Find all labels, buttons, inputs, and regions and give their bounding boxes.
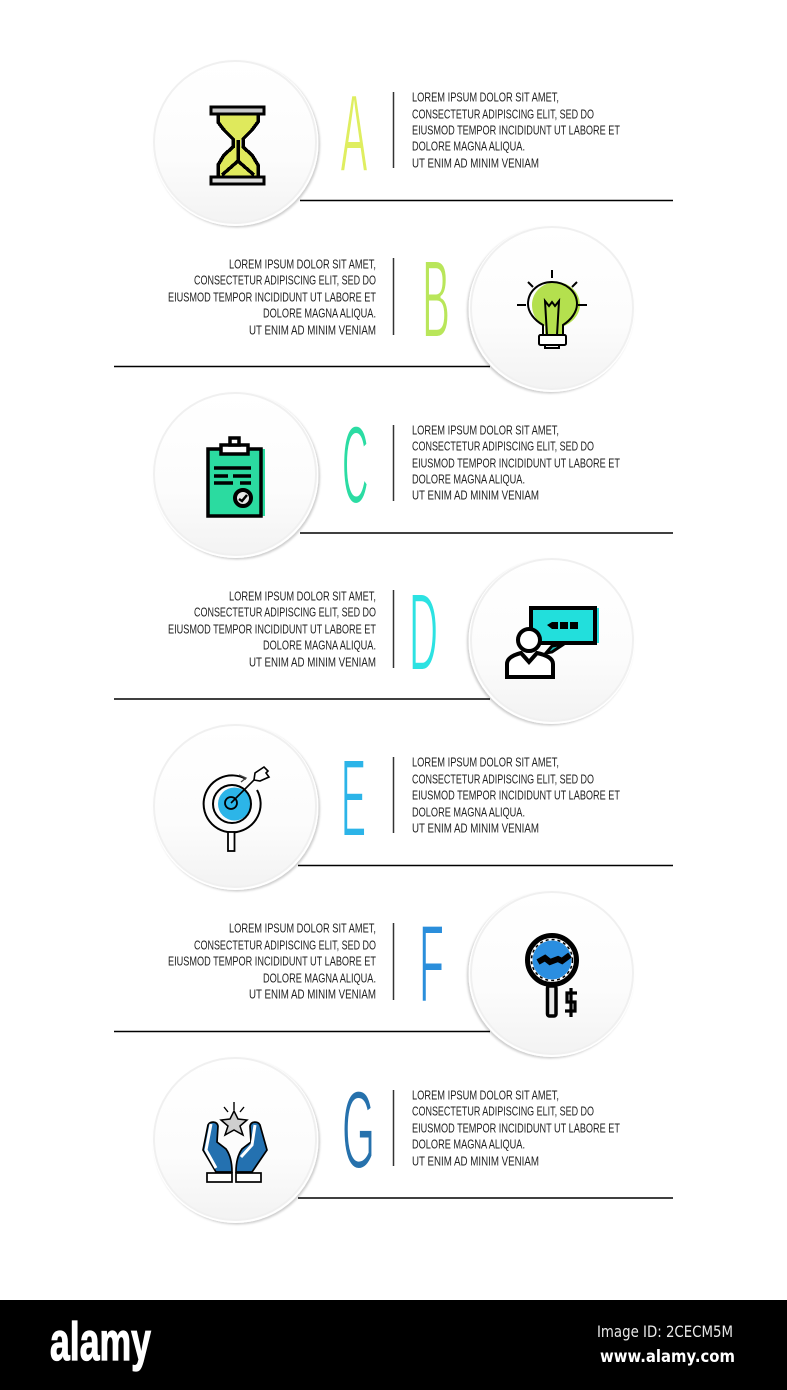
text block B: DOLORE MAGNA ALIQUA. bbox=[263, 306, 376, 320]
text block G: EIUSMOD TEMPOR INCIDIDUNT UT LABORE ET bbox=[412, 1121, 620, 1135]
text block B: EIUSMOD TEMPOR INCIDIDUNT UT LABORE ET bbox=[168, 290, 376, 304]
row G: G bbox=[342, 1069, 375, 1192]
row F bbox=[114, 891, 634, 1057]
icon: person with speech bubble bbox=[507, 608, 599, 677]
text block D: EIUSMOD TEMPOR INCIDIDUNT UT LABORE ET bbox=[168, 622, 376, 636]
row C: C bbox=[342, 404, 368, 527]
text block C: DOLORE MAGNA ALIQUA. bbox=[412, 472, 525, 486]
icon: clipboard bbox=[208, 438, 265, 516]
text block B: LOREM IPSUM DOLOR SIT AMET, bbox=[229, 257, 376, 271]
text block F: EIUSMOD TEMPOR INCIDIDUNT UT LABORE ET bbox=[168, 954, 376, 968]
text block G: CONSECTETUR ADIPISCING ELIT, SED DO bbox=[412, 1104, 594, 1118]
alamy logo: alamy bbox=[50, 1312, 151, 1372]
text block A: UT ENIM AD MINIM VENIAM bbox=[412, 156, 539, 170]
text block F: CONSECTETUR ADIPISCING ELIT, SED DO bbox=[194, 938, 376, 952]
text block E bbox=[412, 755, 620, 835]
text block G: UT ENIM AD MINIM VENIAM bbox=[412, 1154, 539, 1168]
icon: hourglass bbox=[211, 107, 264, 184]
text block A bbox=[412, 90, 620, 170]
text block B bbox=[168, 257, 376, 337]
text block B: CONSECTETUR ADIPISCING ELIT, SED DO bbox=[194, 273, 376, 287]
text block G: LOREM IPSUM DOLOR SIT AMET, bbox=[412, 1088, 559, 1102]
text block D: DOLORE MAGNA ALIQUA. bbox=[263, 638, 376, 652]
row C bbox=[152, 392, 673, 558]
text block C: EIUSMOD TEMPOR INCIDIDUNT UT LABORE ET bbox=[412, 456, 620, 470]
text block A: DOLORE MAGNA ALIQUA. bbox=[412, 139, 525, 153]
text block F bbox=[168, 921, 376, 1001]
icon: hands holding star bbox=[203, 1102, 267, 1182]
website: www.alamy.com bbox=[600, 1347, 735, 1367]
text block E: CONSECTETUR ADIPISCING ELIT, SED DO bbox=[412, 772, 594, 786]
text block D: CONSECTETUR ADIPISCING ELIT, SED DO bbox=[194, 605, 376, 619]
text block D: UT ENIM AD MINIM VENIAM bbox=[249, 655, 376, 669]
text block D bbox=[168, 589, 376, 669]
row E: E bbox=[341, 737, 366, 860]
text block C: LOREM IPSUM DOLOR SIT AMET, bbox=[412, 423, 559, 437]
row A bbox=[152, 60, 673, 226]
icon: magnifier with dollar bbox=[528, 936, 577, 1017]
text block G bbox=[412, 1088, 620, 1168]
image id: Image ID: 2CECM5M bbox=[597, 1322, 733, 1341]
row D: D bbox=[409, 571, 438, 694]
row A: A bbox=[340, 72, 368, 195]
watermark footer bar bbox=[0, 1300, 787, 1390]
row F: F bbox=[419, 903, 444, 1026]
text block A: EIUSMOD TEMPOR INCIDIDUNT UT LABORE ET bbox=[412, 123, 620, 137]
text block E: EIUSMOD TEMPOR INCIDIDUNT UT LABORE ET bbox=[412, 788, 620, 802]
text block D: LOREM IPSUM DOLOR SIT AMET, bbox=[229, 589, 376, 603]
text block C bbox=[412, 423, 620, 502]
text block E: DOLORE MAGNA ALIQUA. bbox=[412, 805, 525, 819]
text block G: DOLORE MAGNA ALIQUA. bbox=[412, 1137, 525, 1151]
row D bbox=[114, 558, 634, 724]
row B bbox=[114, 226, 634, 392]
text block E: UT ENIM AD MINIM VENIAM bbox=[412, 821, 539, 835]
icon: target with arrow bbox=[204, 767, 269, 851]
text block A: CONSECTETUR ADIPISCING ELIT, SED DO bbox=[412, 107, 594, 121]
row B: B bbox=[422, 238, 450, 361]
text block F: UT ENIM AD MINIM VENIAM bbox=[249, 987, 376, 1001]
text block C: UT ENIM AD MINIM VENIAM bbox=[412, 488, 539, 502]
row E bbox=[152, 724, 673, 890]
icon: light bulb bbox=[517, 270, 587, 348]
text block F: DOLORE MAGNA ALIQUA. bbox=[263, 971, 376, 985]
text block E: LOREM IPSUM DOLOR SIT AMET, bbox=[412, 755, 559, 769]
text block A: LOREM IPSUM DOLOR SIT AMET, bbox=[412, 90, 559, 104]
text block F: LOREM IPSUM DOLOR SIT AMET, bbox=[229, 921, 376, 935]
row G bbox=[152, 1057, 673, 1223]
text block B: UT ENIM AD MINIM VENIAM bbox=[249, 323, 376, 337]
text block C: CONSECTETUR ADIPISCING ELIT, SED DO bbox=[412, 439, 594, 453]
